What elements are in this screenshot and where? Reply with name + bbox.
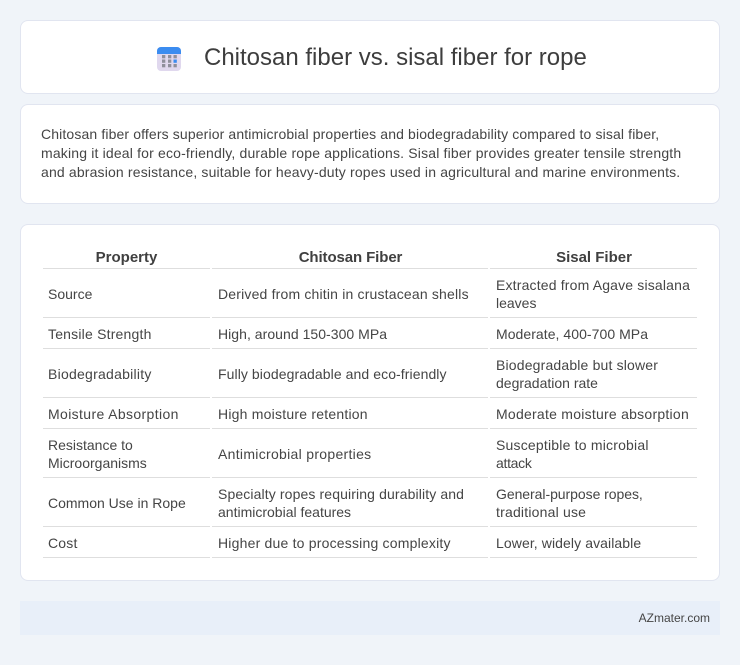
comparison table: Property [96,249,157,266]
title card [20,20,720,94]
comparison table: Lower, widely available [496,535,641,551]
comparison table: Resistance to [48,437,133,453]
comparison table: Susceptible to microbial [496,437,649,453]
comparison table: Derived from chitin in crustacean shells [218,286,469,302]
comparison table: Chitosan Fiber [299,249,402,266]
comparison table: Microorganisms [48,455,147,471]
comparison table: Sisal Fiber [556,249,632,266]
summary text: and abrasion resistance, suitable for heavy-duty ropes used in agricultural and marine environments. [41,164,680,180]
comparison table: High moisture retention [218,406,368,422]
comparison table: High, around 150-300 MPa [218,326,387,342]
comparison table: Moderate moisture absorption [496,406,689,422]
comparison table: Source [48,286,92,302]
comparison table: Cost [48,535,78,551]
comparison table: Specialty ropes requiring durability and [218,486,464,502]
comparison table: Fully biodegradable and eco-friendly [218,366,447,382]
comparison table: General-purpose ropes, [496,486,643,502]
comparison table: Higher due to processing complexity [218,535,451,551]
comparison table: Moderate, 400-700 MPa [496,326,648,342]
icon: calendar [157,47,181,71]
comparison table: degradation rate [496,375,598,391]
summary text: making it ideal for eco-friendly, durable rope applications. Sisal fiber provides greater tensile strength [41,145,681,161]
comparison table: Extracted from Agave sisalana [496,277,690,293]
comparison table card [20,224,720,581]
comparison table: Biodegradability [48,366,152,382]
comparison table: Moisture Absorption [48,406,179,422]
summary card [20,104,720,204]
comparison table: Tensile Strength [48,326,152,342]
summary text: Chitosan fiber offers superior antimicrobial properties and biodegradability compared to sisal fiber, [41,126,659,142]
footer source text: AZmater.com [639,611,710,625]
title: Chitosan fiber vs. sisal fiber for rope [204,44,587,71]
comparison table: Common Use in Rope [48,495,186,511]
footer bar [20,601,720,635]
comparison table: leaves [496,295,536,311]
comparison table: antimicrobial features [218,504,351,520]
comparison table: Antimicrobial properties [218,446,371,462]
comparison table: Biodegradable but slower [496,357,658,373]
summary text [41,126,681,180]
comparison table: attack [496,455,532,471]
comparison table: traditional use [496,504,586,520]
